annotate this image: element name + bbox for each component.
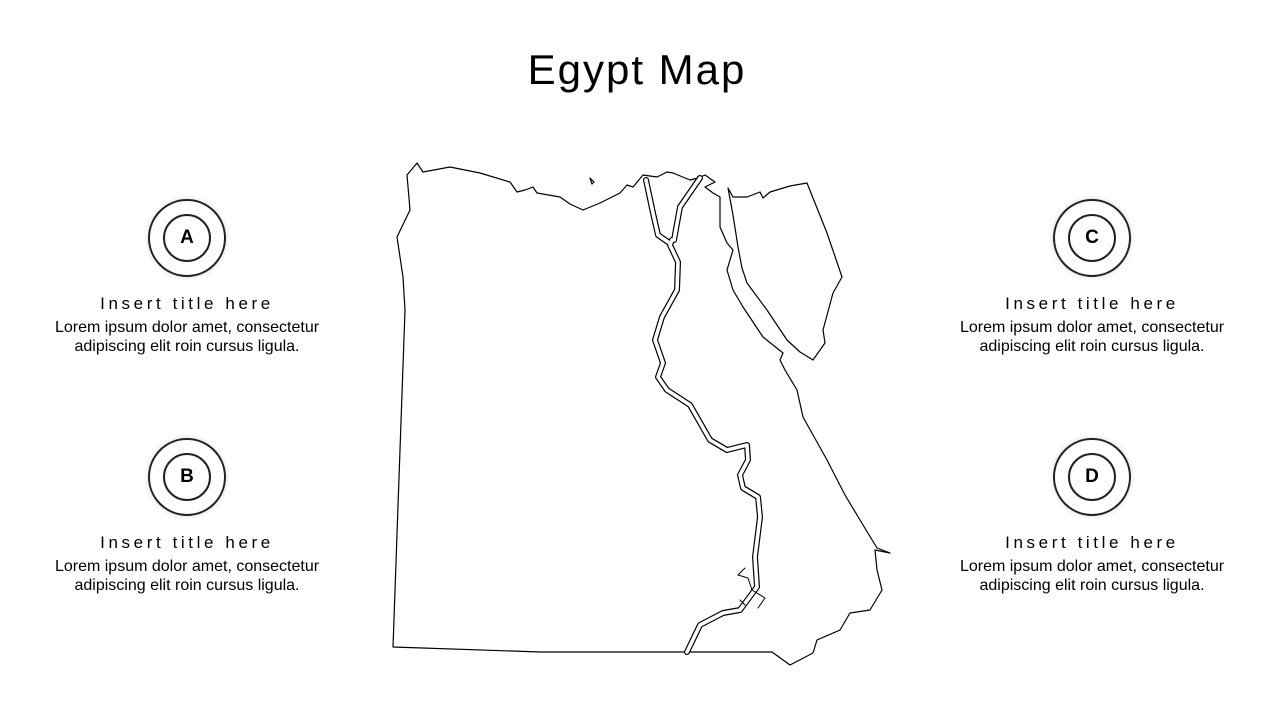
mainland outline — [393, 163, 890, 665]
icon: circle A: A — [180, 227, 194, 248]
text A: Lorem ipsum dolor amet, consectetur — [55, 319, 319, 336]
text C: Insert title here — [1005, 294, 1179, 313]
icon: circle D — [1053, 438, 1131, 516]
text B: adipiscing elit roin cursus ligula. — [74, 577, 300, 594]
item D — [960, 436, 1224, 594]
text D: Lorem ipsum dolor amet, consectetur — [960, 558, 1224, 575]
text A: adipiscing elit roin cursus ligula. — [74, 338, 300, 355]
icon: circle D: D — [1085, 466, 1099, 487]
text B: Insert title here — [100, 533, 274, 552]
title: Egypt Map — [528, 46, 746, 93]
text D: Insert title here — [1005, 533, 1179, 552]
icon: circle B — [148, 438, 226, 516]
text A — [55, 294, 319, 355]
icon: circle C — [1053, 199, 1131, 277]
Sinai — [728, 183, 842, 360]
item C — [960, 197, 1224, 355]
text A: Insert title here — [100, 294, 274, 313]
island — [590, 178, 594, 184]
icon: circle A — [148, 199, 226, 277]
icon: circle B: B — [180, 466, 194, 487]
river Nile — [646, 178, 765, 652]
text B — [55, 533, 319, 594]
text C: Lorem ipsum dolor amet, consectetur — [960, 319, 1224, 336]
item B — [55, 436, 319, 594]
text B: Lorem ipsum dolor amet, consectetur — [55, 558, 319, 575]
item A — [55, 197, 319, 355]
text C: adipiscing elit roin cursus ligula. — [980, 338, 1204, 355]
text C — [960, 294, 1224, 355]
icon: circle C: C — [1085, 227, 1099, 248]
text D: adipiscing elit roin cursus ligula. — [980, 577, 1204, 594]
text D — [960, 533, 1224, 594]
